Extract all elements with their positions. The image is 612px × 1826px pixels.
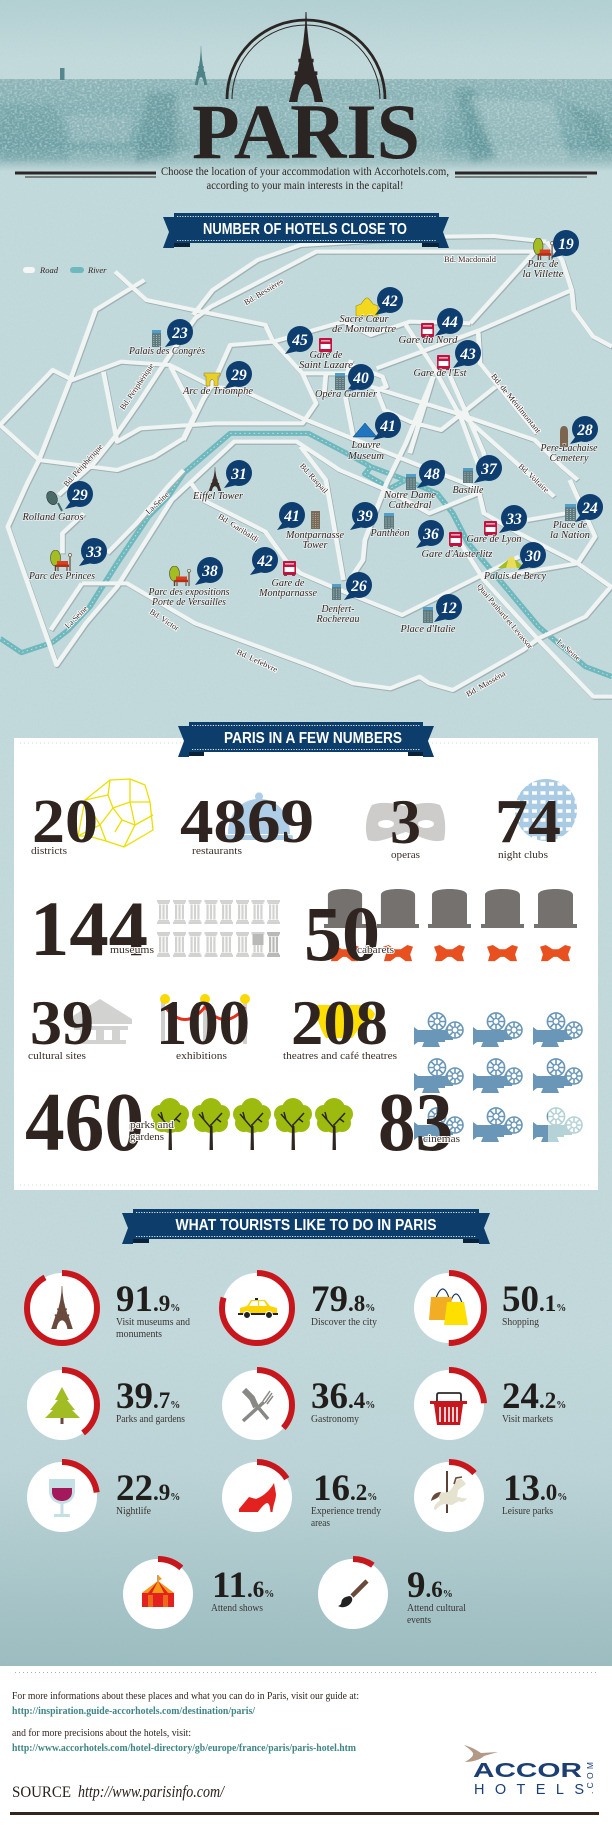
landmark: Parc des Princes: Parc des Princes bbox=[28, 570, 95, 582]
logo: Accor Hotels bbox=[464, 1745, 595, 1798]
road and river names: Bd. Garibaldi bbox=[216, 512, 261, 544]
header: Paris skyline and title bbox=[0, 12, 612, 192]
landmark: Arc de Triomphe: 29 bbox=[230, 367, 247, 384]
stat: 3 operas: 3 bbox=[390, 786, 421, 857]
legend: Road bbox=[39, 265, 59, 275]
stat: 460 parks and gardens: 460 bbox=[25, 1076, 144, 1169]
landmark: Palais des Congrès bbox=[128, 319, 205, 357]
landmark: Opéra Garnier: 40 bbox=[352, 370, 369, 387]
landmark: Gare du Nord: Gare du Nord bbox=[398, 334, 458, 346]
stat: 144 museums bbox=[30, 885, 280, 972]
stat: 83 cinemas: 83 bbox=[378, 1076, 453, 1169]
landmark: Parc de la Villette: 19 bbox=[558, 236, 574, 253]
landmark: Eiffel Tower: 31 bbox=[230, 466, 247, 483]
landmark: Montparnasse Tower: 41 bbox=[283, 508, 300, 525]
activity: parks and gardens 39.7%: 39.7% bbox=[116, 1376, 180, 1417]
landmark: Palais de Bercy: 30 bbox=[524, 548, 541, 565]
stat: 20 districts bbox=[31, 779, 153, 857]
road and river names: Bd. Masséna bbox=[464, 669, 507, 699]
activity: attend cultural events 9.6%: 9.6% bbox=[407, 1565, 453, 1606]
landmark: Gare du Nord: 44 bbox=[441, 314, 458, 331]
landmark: Rolland Garros bbox=[22, 481, 93, 523]
landmark: Parc des expositions Porte de Versailles bbox=[148, 557, 230, 608]
landmark: Parc des expositions Porte de Versailles: Parc des expositions bbox=[148, 586, 230, 598]
landmark: Arc de Triomphe: Arc de Triomphe bbox=[182, 385, 253, 397]
more information text bbox=[12, 1691, 359, 1754]
landmark: Louvre Museum: Louvre bbox=[351, 439, 381, 451]
road and river names: Bd. Bessières bbox=[243, 277, 285, 307]
activity: visit museums and monuments 91.9% bbox=[27, 1273, 191, 1343]
landmark: Sacré Cœur: 42 bbox=[381, 293, 398, 310]
landmark: Panthéon bbox=[350, 502, 410, 539]
stat: 39 cultural sites: 39 bbox=[30, 987, 94, 1058]
landmark: Gare de Saint Lazare: Gare de bbox=[310, 349, 343, 361]
landmark: Bastille: Bastille bbox=[452, 484, 484, 496]
activity: discover the city 79.8% bbox=[222, 1273, 378, 1343]
stat: 74 night clubs: 74 bbox=[495, 788, 561, 856]
road and river names: Bd. Voltaire bbox=[517, 462, 551, 495]
activity: gastronomy 36.4%: Gastronomy bbox=[311, 1414, 360, 1425]
logo: Accor Hotels: ACCOR bbox=[473, 1760, 583, 1782]
legend: River bbox=[87, 265, 107, 275]
river Seine bbox=[0, 433, 612, 677]
intro text: Choose the location of your accommodation with Accorhotels.com, bbox=[161, 164, 449, 178]
activity: visit museums and monuments 91.9%: Visit museums and bbox=[116, 1317, 191, 1328]
activity: attend shows 11.6% bbox=[123, 1559, 274, 1629]
landmark: Place de la Nation: 24 bbox=[581, 500, 598, 517]
stat: 50 cabarets: cabarets bbox=[357, 944, 394, 956]
legend bbox=[23, 265, 107, 275]
landmark: Sacré Cœur: Sacré Cœur bbox=[340, 313, 389, 325]
landmark: Gare de Lyon: Gare de Lyon bbox=[466, 533, 522, 545]
road and river names: Bd. Lefebvre bbox=[235, 647, 279, 674]
stat: 208 theatres and café theatres: 208 bbox=[291, 987, 388, 1058]
landmark: Sacré Cœur: de Montmartre bbox=[332, 323, 396, 335]
landmark: Parc des Princes: 33 bbox=[85, 544, 102, 561]
activity: shopping 50.1%: Shopping bbox=[502, 1317, 540, 1328]
stat: 39 cultural sites: cultural sites bbox=[28, 1050, 86, 1062]
activity: visit markets 24.2%: Visit markets bbox=[502, 1414, 553, 1425]
activity: attend shows 11.6%: Attend shows bbox=[211, 1603, 263, 1614]
stat: 208 theatres and café theatres: theatres and café theatres bbox=[283, 1050, 397, 1062]
landmark: Opéra Garnier bbox=[315, 364, 378, 400]
landmark: Gare de Saint Lazare bbox=[285, 326, 353, 371]
landmark: Père-Lachaise Cemetery: Cemetery bbox=[550, 452, 589, 464]
landmark: Arc de Triomphe bbox=[182, 361, 253, 397]
more information text: For more informations about these places and what you can do in Paris, visit our guide at: bbox=[12, 1691, 359, 1702]
stat: 50 cabarets: 50 bbox=[304, 890, 380, 977]
landmark: Notre Dame Cathedral: Notre Dame bbox=[383, 489, 436, 501]
activity: gastronomy 36.4%: 36.4% bbox=[311, 1376, 375, 1417]
landmark: Louvre Museum bbox=[347, 412, 401, 462]
road network bbox=[0, 236, 612, 698]
landmark: Panthéon: 39 bbox=[356, 508, 373, 525]
icon: Eiffel Tower bbox=[289, 12, 323, 102]
landmark: Gare de Montparnasse: Montparnasse bbox=[258, 587, 317, 599]
map: number of hotels close to bbox=[0, 230, 612, 699]
banner: what tourists like to do in Paris bbox=[122, 1209, 490, 1244]
road and river names: Bd. Périphérique bbox=[62, 442, 105, 488]
intro text bbox=[161, 164, 449, 192]
landmark: Bastille bbox=[452, 455, 502, 496]
landmark: Notre Dame Cathedral: Cathedral bbox=[388, 499, 432, 511]
landmark: Gare de Lyon bbox=[466, 505, 527, 545]
road and river names: Bd. Périphérique bbox=[118, 361, 156, 412]
stat: 460 parks and gardens: gardens bbox=[130, 1131, 164, 1143]
stat: 4869 restaurants: restaurants bbox=[192, 845, 242, 857]
stat: 50 cabarets bbox=[304, 889, 577, 977]
activity: experience trendy areas 16.2% bbox=[222, 1462, 382, 1532]
banner: Paris in a few numbers: PARIS IN A FEW NUMBERS bbox=[224, 730, 402, 747]
stat: 4869 restaurants: 4869 bbox=[180, 788, 314, 856]
landmark: Gare d'Austerlitz bbox=[416, 520, 493, 560]
activity: leisure parks 13.0% bbox=[414, 1462, 567, 1532]
activity: leisure parks 13.0%: Leisure parks bbox=[502, 1506, 553, 1517]
landmark: Place d'Italie: Place d'Italie bbox=[400, 623, 456, 635]
landmark: Place de la Nation: Place de bbox=[552, 519, 587, 531]
landmark: Rolland Garros: Rolland Garos bbox=[22, 511, 83, 523]
activity: parks and gardens 39.7%: Parks and gardens bbox=[116, 1414, 185, 1425]
stat: 20 districts: 20 bbox=[32, 788, 98, 856]
landmark: Denfert-Rochereau: Rochereau bbox=[316, 613, 360, 625]
panel: Paris in a few numbers bbox=[14, 722, 598, 1190]
landmark: Gare de Lyon: 33 bbox=[505, 511, 522, 528]
stat: 39 cultural sites bbox=[28, 987, 132, 1062]
activity: experience trendy areas 16.2%: areas bbox=[311, 1518, 330, 1529]
landmark: Gare de l'Est: 43 bbox=[459, 346, 476, 363]
arch behind the tower bbox=[227, 20, 385, 99]
activity: leisure parks 13.0%: 13.0% bbox=[503, 1468, 567, 1509]
activity: attend shows 11.6%: 11.6% bbox=[212, 1565, 274, 1606]
source: http://www.parisinfo.com/ bbox=[78, 1782, 226, 1801]
activity: shopping 50.1%: 50.1% bbox=[502, 1279, 566, 1320]
skyline photo band bbox=[0, 46, 612, 171]
road and river names: La Seine bbox=[555, 637, 583, 663]
stat: 83 cinemas: cinemas bbox=[423, 1133, 460, 1145]
bottom bar bbox=[10, 1812, 599, 1815]
stat: 460 parks and gardens bbox=[25, 1076, 353, 1169]
intro text: according to your main interests in the capital! bbox=[206, 178, 404, 192]
landmark: Denfert-Rochereau: Denfert- bbox=[321, 603, 355, 615]
stat: 100 exhibitions: exhibitions bbox=[176, 1050, 227, 1062]
activity: discover the city 79.8%: 79.8% bbox=[311, 1279, 375, 1320]
landmark: Montparnasse Tower: Tower bbox=[302, 539, 328, 551]
landmark: Parc de la Villette: la Villette bbox=[522, 268, 564, 280]
road and river names: Bd. Victor bbox=[148, 607, 181, 633]
landmark: Gare de Saint Lazare: 45 bbox=[291, 332, 308, 349]
landmark: Place de la Nation: la Nation bbox=[550, 529, 590, 541]
road and river names: Bd. Raspail bbox=[298, 461, 330, 496]
stat: 20 districts: districts bbox=[31, 845, 67, 857]
landmark: Gare de Montparnasse: 42 bbox=[256, 553, 273, 570]
road and river names: La Seine bbox=[144, 490, 171, 516]
banner: number of hotels close to bbox=[163, 213, 449, 248]
landmark: Eiffel Tower: Eiffel Tower bbox=[192, 490, 244, 502]
activity: parks and gardens 39.7% bbox=[27, 1370, 185, 1440]
road and river names: La Seine bbox=[63, 604, 90, 630]
landmark: Panthéon: Panthéon bbox=[370, 527, 410, 539]
road and river names bbox=[62, 255, 583, 699]
landmark: Sacré Cœur bbox=[332, 287, 403, 335]
landmark: Notre Dame Cathedral: 48 bbox=[423, 466, 440, 483]
banner: number of hotels close to: NUMBER OF HOTELS CLOSE TO bbox=[203, 221, 407, 238]
activity: attend cultural events 9.6%: events bbox=[407, 1615, 431, 1626]
landmark: Notre Dame Cathedral bbox=[383, 460, 445, 511]
landmark: Rolland Garros: 29 bbox=[71, 487, 88, 504]
landmark: Place de la Nation bbox=[550, 494, 603, 541]
stat: 3 operas: operas bbox=[391, 849, 420, 861]
landmark: Parc des Princes bbox=[28, 538, 107, 582]
landmark: Palais de Bercy bbox=[483, 542, 546, 582]
stat: 74 night clubs bbox=[495, 779, 577, 861]
stat: 74 night clubs: night clubs bbox=[498, 849, 548, 861]
activity: nightlife 22.9% bbox=[27, 1462, 180, 1532]
more information text: http://www.accorhotels.com/hotel-directory/gb/europe/france/paris/paris-hotel.htm bbox=[12, 1743, 356, 1754]
landmark: Opéra Garnier: Opéra Garnier bbox=[315, 388, 378, 400]
activity: visit museums and monuments 91.9%: monuments bbox=[116, 1329, 162, 1340]
landmark: Bastille: 37 bbox=[480, 461, 498, 478]
source bbox=[12, 1782, 226, 1801]
activity: nightlife 22.9%: Nightlife bbox=[116, 1506, 151, 1517]
stat: 100 exhibitions: 100 bbox=[156, 987, 250, 1058]
landmark: Parc de la Villette bbox=[522, 230, 579, 280]
landmark: Père-Lachaise Cemetery bbox=[540, 416, 598, 464]
landmark: Gare de l'Est: Gare de l'Est bbox=[414, 367, 467, 379]
landmark: Palais des Congrès: 23 bbox=[171, 325, 188, 342]
logo: Accor Hotels: HOTELS bbox=[474, 1782, 584, 1798]
left rule bbox=[15, 172, 156, 178]
activity: attend cultural events 9.6%: Attend cultural bbox=[407, 1603, 466, 1614]
landmark: Gare de l'Est bbox=[414, 340, 481, 379]
more information text: http://inspiration.guide-accorhotels.com/destination/paris/ bbox=[12, 1706, 256, 1717]
landmark: Père-Lachaise Cemetery: 28 bbox=[576, 422, 593, 439]
landmark: Parc des expositions Porte de Versailles: 38 bbox=[201, 563, 218, 580]
landmark: Louvre Museum: 41 bbox=[379, 418, 396, 435]
activity: visit museums and monuments 91.9%: 91.9% bbox=[116, 1279, 180, 1320]
stat: 144 museums: museums bbox=[110, 944, 154, 956]
landmark: Place d'Italie: 12 bbox=[441, 600, 457, 617]
activity: nightlife 22.9%: 22.9% bbox=[116, 1468, 180, 1509]
landmark: Palais de Bercy: Palais de Bercy bbox=[483, 570, 546, 582]
banner: what tourists like to do in Paris: WHAT TOURISTS LIKE TO DO IN PARIS bbox=[176, 1217, 437, 1234]
road and river names: Bd. Macdonald bbox=[444, 255, 496, 264]
landmark: Gare de Montparnasse bbox=[250, 547, 317, 599]
activity: discover the city 79.8%: Discover the city bbox=[311, 1317, 378, 1328]
landmark: Gare du Nord bbox=[398, 308, 463, 346]
title: PARIS bbox=[192, 88, 420, 175]
landmark: Montparnasse Tower: Montparnasse bbox=[285, 529, 344, 541]
landmark: Denfert-Rochereau: 26 bbox=[350, 578, 367, 595]
activity: attend cultural events 9.6% bbox=[318, 1559, 466, 1629]
landmark: Parc de la Villette: Parc de bbox=[527, 258, 559, 270]
activity: visit markets 24.2% bbox=[414, 1370, 566, 1440]
landmark: Gare de Saint Lazare: Saint Lazare bbox=[299, 359, 353, 371]
activity: experience trendy areas 16.2%: Experience trendy bbox=[311, 1506, 382, 1517]
landmark: Gare de Montparnasse: Gare de bbox=[272, 577, 305, 589]
stat: 3 operas bbox=[366, 786, 445, 861]
landmark: Palais des Congrès: Palais des Congrès bbox=[128, 345, 205, 357]
landmark: Louvre Museum: Museum bbox=[347, 450, 384, 462]
logo: Accor Hotels: .COM bbox=[585, 1762, 595, 1794]
panel: footer bbox=[0, 1666, 612, 1826]
source: SOURCE bbox=[12, 1784, 71, 1801]
right rule bbox=[455, 172, 597, 178]
activity: experience trendy areas 16.2%: 16.2% bbox=[313, 1468, 377, 1509]
activity: shopping 50.1% bbox=[414, 1273, 566, 1343]
stat: 83 cinemas bbox=[380, 1012, 583, 1151]
road and river names: Quai Panhard et Levassor bbox=[475, 582, 535, 651]
stat: 460 parks and gardens: parks and bbox=[130, 1119, 175, 1131]
landmark: Montparnasse Tower bbox=[277, 502, 344, 551]
banner: Paris in a few numbers bbox=[178, 722, 434, 757]
road and river names: Bd. de Ménilmontant bbox=[489, 372, 543, 436]
landmark: Place d'Italie bbox=[400, 594, 462, 635]
landmark: Denfert-Rochereau bbox=[316, 572, 372, 625]
landmark: Père-Lachaise Cemetery: Pere-Lachaise bbox=[540, 442, 598, 454]
landmark: Gare d'Austerlitz: Gare d'Austerlitz bbox=[422, 548, 493, 560]
landmark: Eiffel Tower bbox=[192, 460, 252, 502]
landmark: Gare d'Austerlitz: 36 bbox=[422, 526, 439, 543]
more information text: and for more precisions about the hotels, visit: bbox=[12, 1728, 191, 1739]
landmark: Parc des expositions Porte de Versailles: Porte de Versailles bbox=[151, 596, 226, 608]
activity: gastronomy 36.4% bbox=[222, 1370, 375, 1440]
activity: visit markets 24.2%: 24.2% bbox=[502, 1376, 566, 1417]
stat: 144 museums: 144 bbox=[30, 885, 148, 972]
